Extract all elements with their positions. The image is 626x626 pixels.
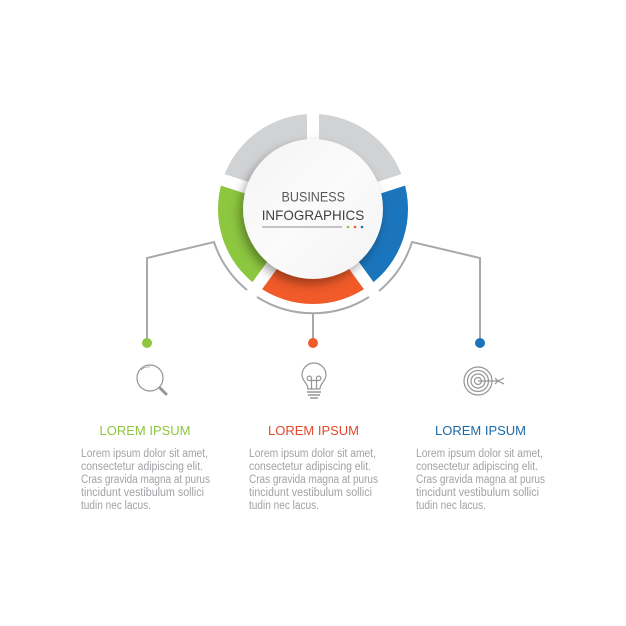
center title (262, 188, 364, 228)
icon: light bulb (302, 363, 326, 398)
center title: BUSINESS (282, 188, 345, 204)
body text: consectetur adipiscing elit. (81, 461, 203, 473)
column: orange (249, 423, 378, 512)
body text (416, 448, 545, 512)
body text: tudin nec lacus. (249, 500, 319, 512)
heading: LOREM IPSUM (268, 423, 359, 438)
body text: consectetur adipiscing elit. (249, 461, 371, 473)
connector: center (257, 297, 369, 343)
column: green (81, 423, 210, 512)
body text: consectetur adipiscing elit. (416, 461, 538, 473)
center title: INFOGRAPHICS (262, 207, 364, 223)
body text (249, 448, 378, 512)
body text: tincidunt vestibulum sollici (416, 487, 539, 499)
connector: left (147, 242, 247, 343)
center circle (243, 139, 383, 279)
body text: Lorem ipsum dolor sit amet, (416, 448, 543, 460)
body text: Lorem ipsum dolor sit amet, (81, 448, 208, 460)
dot: orange (308, 338, 318, 348)
body text: tudin nec lacus. (81, 500, 151, 512)
column: blue (416, 423, 545, 512)
icon: target with arrow (464, 367, 504, 395)
segment: orange (257, 209, 369, 304)
segment: green (218, 180, 313, 286)
body text: tudin nec lacus. (416, 500, 486, 512)
heading: LOREM IPSUM (435, 423, 526, 438)
segment: gray left (223, 114, 313, 209)
connector: right (379, 242, 480, 343)
body text: Cras gravida magna at purus (249, 474, 378, 486)
body text: Lorem ipsum dolor sit amet, (249, 448, 376, 460)
body text: tincidunt vestibulum sollici (81, 487, 204, 499)
icon: magnifier (137, 365, 166, 394)
segment: gray right (313, 114, 403, 209)
segment: blue (313, 180, 408, 286)
heading: LOREM IPSUM (100, 423, 190, 438)
dot: green (142, 338, 152, 348)
body text (81, 448, 210, 512)
body text: Cras gravida magna at purus (416, 474, 545, 486)
dot: blue (475, 338, 485, 348)
body text: tincidunt vestibulum sollici (249, 487, 372, 499)
donut ring (217, 108, 409, 304)
body text: Cras gravida magna at purus (81, 474, 210, 486)
